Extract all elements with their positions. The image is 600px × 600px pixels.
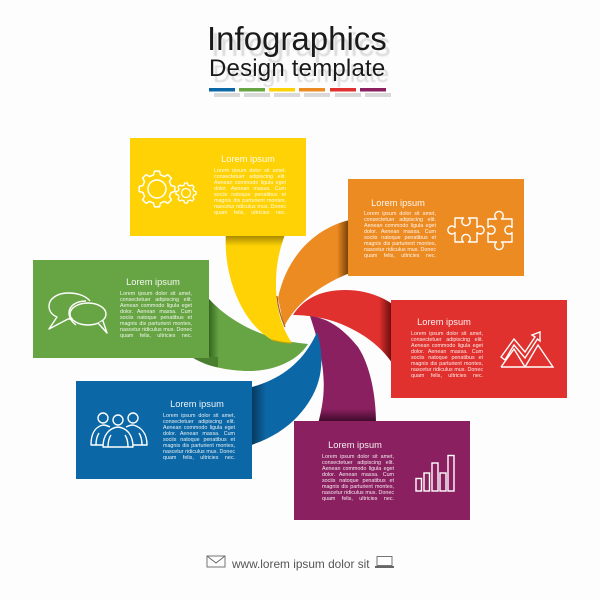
heading: Lorem ipsum xyxy=(221,154,275,164)
body text: nascetur ridiculus mus. Donec xyxy=(163,449,235,455)
panel: red growth chart xyxy=(391,300,567,398)
body text: magnis dis parturient montes, xyxy=(411,361,483,367)
body text: consectetuer adipiscing elit. xyxy=(411,337,483,343)
body text: dolor. Aenean massa. Cum xyxy=(364,229,436,235)
panel: blue team xyxy=(76,381,252,479)
footer xyxy=(206,556,394,571)
body text: magnis dis parturient montes, xyxy=(163,443,235,449)
icon: speech bubbles xyxy=(48,292,108,334)
icon: laptop xyxy=(375,556,394,568)
heading: Lorem ipsum xyxy=(328,440,382,450)
panel: purple bar chart xyxy=(294,421,470,520)
body text: sociis natoque penatibus et xyxy=(322,478,394,484)
title shadow xyxy=(211,26,391,88)
body text: quam felis, ultricies nec. xyxy=(322,496,394,502)
body text xyxy=(214,168,286,216)
body text: nascetur ridiculus mus. Donec xyxy=(322,490,394,496)
icon: puzzle pieces xyxy=(447,210,513,250)
body text xyxy=(411,331,483,379)
body text: sociis natoque penatibus et xyxy=(411,355,483,361)
body text: nascetur ridiculus mus. Donec xyxy=(411,367,483,373)
body text: sociis natoque penatibus et xyxy=(364,235,436,241)
ribbon: orange xyxy=(278,220,350,327)
body text: Lorem ipsum dolor sit amet, xyxy=(364,211,436,217)
body text: quam felis, ultricies nec. xyxy=(411,373,483,379)
body text: Lorem ipsum dolor sit amet, xyxy=(163,413,235,419)
body text: magnis dis parturient montes, xyxy=(120,321,192,327)
body text: dolor. Aenean massa. Cum xyxy=(120,309,192,315)
title shadow: Design template xyxy=(213,61,389,88)
heading: Lorem ipsum xyxy=(371,198,425,208)
body text xyxy=(364,211,436,259)
body text: Aenean commodo ligula eget xyxy=(214,180,286,186)
body text: sociis natoque penatibus et xyxy=(163,437,235,443)
body text: quam felis, ultricies nec. xyxy=(364,253,436,259)
body text: Aenean commodo ligula eget xyxy=(364,223,436,229)
body text: Aenean commodo ligula eget xyxy=(120,303,192,309)
ribbon: red xyxy=(293,290,395,368)
title line 1: Infographics xyxy=(207,20,387,57)
icon: bar chart xyxy=(415,454,455,492)
panel: yellow gears xyxy=(130,138,306,236)
icon: envelope xyxy=(206,556,226,568)
ribbon: blue xyxy=(248,332,321,446)
title line 2: Design template xyxy=(209,55,385,82)
body text: quam felis, ultricies nec. xyxy=(214,210,286,216)
body text: Aenean commodo ligula eget xyxy=(163,425,235,431)
body text: sociis natoque penatibus et xyxy=(120,315,192,321)
body text: magnis dis parturient montes, xyxy=(214,198,286,204)
ribbon: purple xyxy=(310,316,376,424)
body text: Lorem ipsum dolor sit amet, xyxy=(120,291,192,297)
title shadow: Infographics xyxy=(211,26,391,63)
body text: dolor. Aenean massa. Cum xyxy=(163,431,235,437)
body text: consectetuer adipiscing elit. xyxy=(214,174,286,180)
icon: mountain chart with arrow xyxy=(500,331,554,368)
body text: consectetuer adipiscing elit. xyxy=(163,419,235,425)
panel: orange puzzle xyxy=(348,179,524,276)
body text: quam felis, ultricies nec. xyxy=(163,455,235,461)
body text: magnis dis parturient montes, xyxy=(322,484,394,490)
body text xyxy=(322,454,394,502)
body text: dolor. Aenean massa. Cum xyxy=(214,186,286,192)
body text: quam felis, ultricies nec. xyxy=(120,333,192,339)
body text: Lorem ipsum dolor sit amet, xyxy=(411,331,483,337)
body text xyxy=(120,291,192,339)
body text: Aenean commodo ligula eget xyxy=(322,466,394,472)
title xyxy=(207,20,391,88)
panel: green chat xyxy=(33,260,209,358)
body text: Aenean commodo ligula eget xyxy=(411,343,483,349)
heading: Lorem ipsum xyxy=(170,399,224,409)
heading: Lorem ipsum xyxy=(417,317,471,327)
body text xyxy=(163,413,235,461)
body text: consectetuer adipiscing elit. xyxy=(364,217,436,223)
ribbon: green xyxy=(190,294,308,371)
ribbon: yellow xyxy=(226,232,292,343)
icon: gears xyxy=(138,170,197,208)
heading: Lorem ipsum xyxy=(126,277,180,287)
body text: sociis natoque penatibus et xyxy=(214,192,286,198)
body text: Lorem ipsum dolor sit amet, xyxy=(214,168,286,174)
body text: nascetur ridiculus mus. Donec xyxy=(364,247,436,253)
website text: www.lorem ipsum dolor sit xyxy=(232,557,370,571)
body text: magnis dis parturient montes, xyxy=(364,241,436,247)
body text: dolor. Aenean massa. Cum xyxy=(322,472,394,478)
body text: nascetur ridiculus mus. Donec xyxy=(120,327,192,333)
body text: Lorem ipsum dolor sit amet, xyxy=(322,454,394,460)
body text: consectetuer adipiscing elit. xyxy=(322,460,394,466)
icon: people xyxy=(90,412,148,448)
body text: dolor. Aenean massa. Cum xyxy=(411,349,483,355)
body text: consectetuer adipiscing elit. xyxy=(120,297,192,303)
body text: nascetur ridiculus mus. Donec xyxy=(214,204,286,210)
